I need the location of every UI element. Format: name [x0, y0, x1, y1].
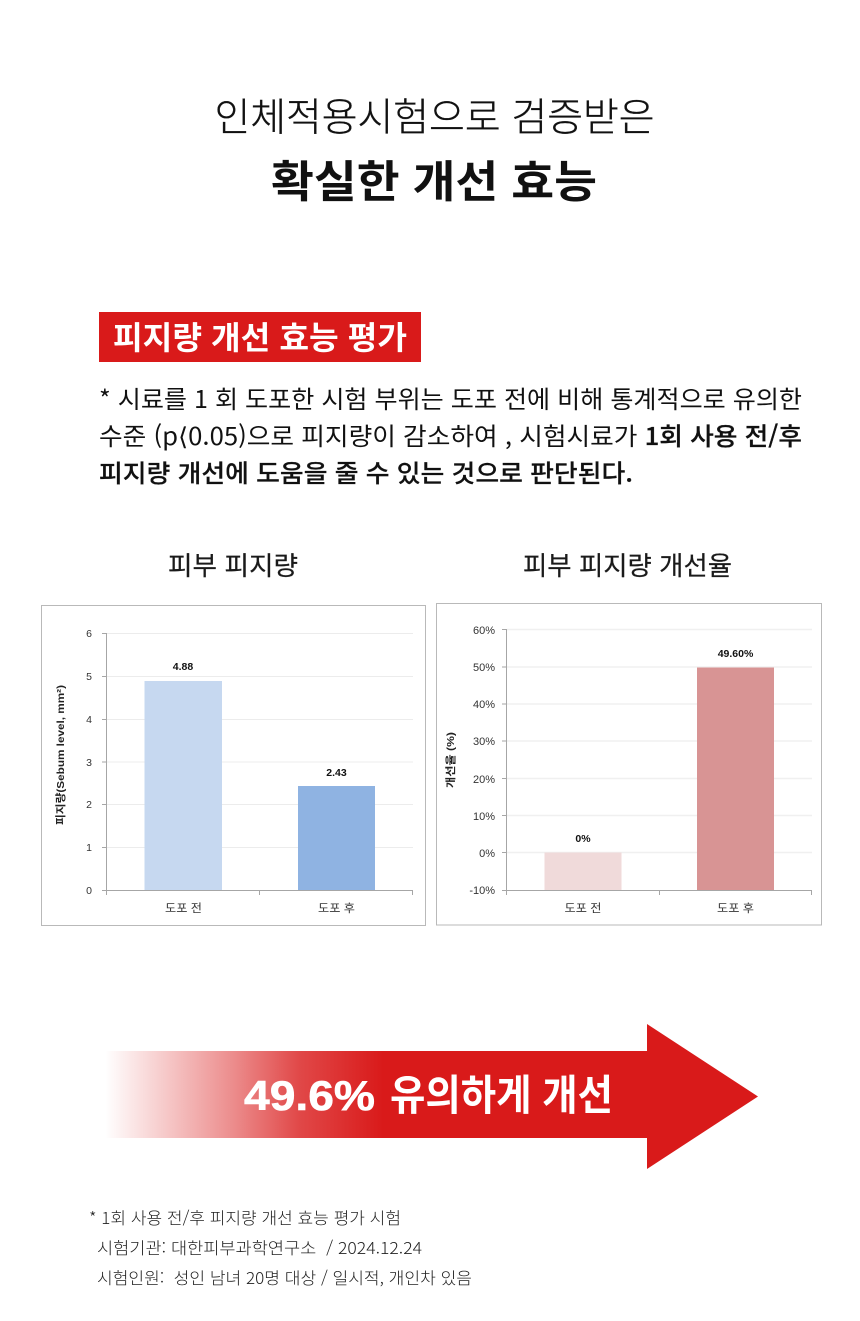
bar chart: sebum level: 3	[86, 757, 92, 769]
description text: 피지량 개선에 도움을 줄 수 있는 것으로 판단된다.	[99, 455, 633, 490]
description text: * 시료를 1 회 도포한 시험 부위는 도포 전에 비해 통계적으로 유의한	[99, 381, 802, 416]
arrow label: 유의하게 개선	[390, 1062, 613, 1123]
description text	[99, 381, 802, 490]
bar chart: improvement rate: 60%	[473, 625, 495, 637]
bar chart: sebum level: 0	[86, 885, 92, 897]
footnote: * 1회 사용 전/후 피지량 개선 효능 평가 시험	[89, 1205, 401, 1229]
bar chart: sebum level: 도포 전	[165, 900, 202, 916]
bar chart: improvement rate: 도포 후	[717, 900, 754, 916]
bar chart: sebum level: 도포 후	[318, 900, 355, 916]
bar: before	[144, 681, 222, 890]
bar chart: improvement rate: 50%	[473, 662, 495, 674]
bar chart: sebum level: 2	[86, 799, 92, 811]
footnote: 시험인원: 성인 남녀 20명 대상 / 일시적, 개인차 있음	[97, 1265, 472, 1289]
bar chart: improvement rate: 0%	[479, 848, 495, 860]
bar chart: sebum level	[42, 606, 426, 926]
bar chart: improvement rate: 개선율 (%)	[444, 732, 457, 788]
bar chart: improvement rate: 0%	[575, 833, 591, 845]
bar: before	[544, 852, 622, 890]
bar chart: sebum level: 2.43	[326, 767, 347, 779]
bar: after	[697, 668, 774, 890]
bar chart: improvement rate: 40%	[473, 699, 495, 711]
title: 확실한 개선 효능	[271, 146, 597, 210]
arrow label	[244, 1062, 613, 1123]
bar chart: improvement rate: 20%	[473, 774, 495, 786]
section heading badge: 피지량 개선 효능 평가	[113, 313, 407, 359]
bar chart: improvement rate: 도포 전	[564, 900, 602, 916]
chart heading: 피부 피지량: 피부 피지량	[168, 546, 298, 583]
bar chart: sebum level: 4.88	[173, 661, 193, 673]
bar chart: sebum level: 4	[86, 714, 92, 726]
arrow: improvement result	[105, 1024, 758, 1169]
chart heading: 피부 피지량 개선율: 피부 피지량 개선율	[523, 546, 732, 583]
bar chart: improvement rate: 30%	[473, 736, 495, 748]
bar chart: improvement rate: 10%	[473, 811, 495, 823]
bar chart: sebum level: 6	[86, 628, 92, 640]
title: 인체적용시험으로 검증받은	[214, 87, 654, 143]
bar chart: improvement rate	[436, 604, 822, 925]
bar chart: sebum level: 피지량(Sebum level, mm²)	[54, 685, 67, 825]
arrow label: 49.6%	[244, 1072, 375, 1119]
footnote	[89, 1205, 472, 1289]
bar: after	[298, 786, 375, 890]
title	[214, 87, 654, 210]
footnote: 시험기관: 대한피부과학연구소 / 2024.12.24	[97, 1235, 422, 1259]
bar chart: improvement rate: -10%	[469, 885, 495, 897]
bar chart: sebum level: 1	[86, 842, 92, 854]
bar chart: improvement rate: 49.60%	[718, 648, 754, 660]
bar chart: sebum level: 5	[86, 671, 92, 683]
description text: 수준 (p⟨0.05)으로 피지량이 감소하여 , 시험시료가 1회 사용 전/후	[99, 418, 802, 453]
